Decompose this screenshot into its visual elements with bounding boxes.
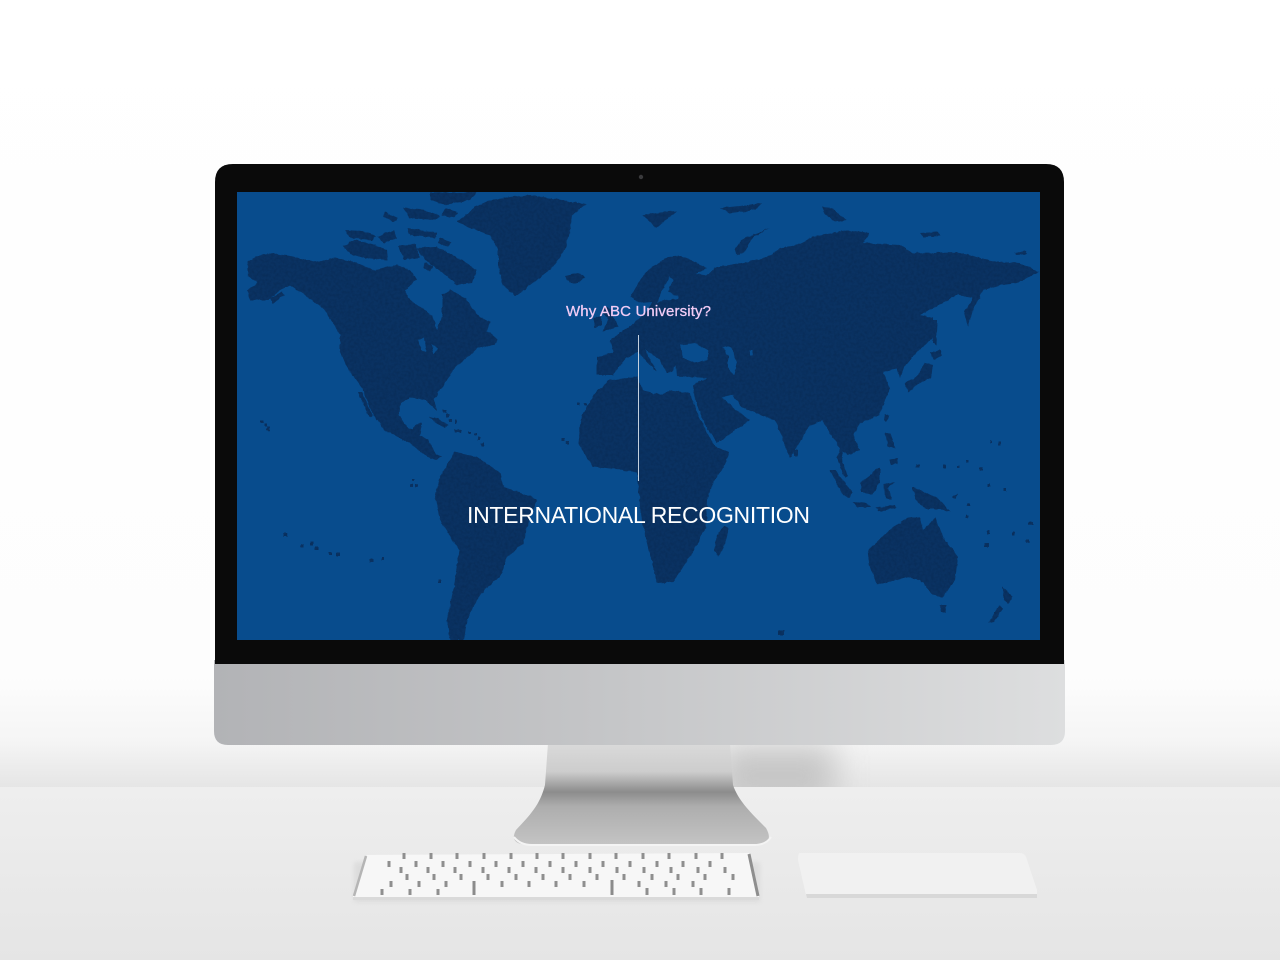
Greenland	[457, 195, 587, 297]
Africa	[578, 377, 730, 583]
Arctic Eurasian islands	[642, 203, 1027, 258]
trackpad	[798, 853, 1037, 898]
world map	[247, 192, 1039, 640]
Japan	[905, 320, 942, 392]
New Zealand	[988, 587, 1013, 623]
main title: INTERNATIONAL RECOGNITION	[467, 502, 810, 528]
subtitle: Why ABC University?	[566, 303, 711, 320]
webcam	[639, 175, 643, 179]
Canadian Arctic islands	[343, 192, 477, 285]
Eurasia	[597, 230, 1039, 462]
Tasmania	[940, 605, 947, 612]
United Kingdom and Ireland	[594, 306, 619, 331]
Alaska peninsula	[270, 292, 284, 304]
Iceland	[565, 273, 585, 283]
North America	[247, 253, 498, 460]
Madagascar	[714, 526, 729, 557]
monitor chin	[214, 660, 1065, 745]
keyboard keys	[382, 853, 733, 895]
screen background	[237, 192, 1040, 640]
monitor black bezel	[215, 164, 1064, 664]
stand shadow on wall	[730, 745, 848, 787]
vertical divider line	[638, 335, 639, 481]
Baja California	[358, 392, 373, 417]
Caribbean islands	[429, 410, 484, 446]
Indonesia and Philippines	[794, 414, 958, 512]
table surface	[0, 787, 1280, 960]
keyboard	[353, 853, 760, 902]
monitor stand	[514, 743, 771, 845]
small ocean islands	[260, 400, 1033, 635]
Australia	[868, 517, 958, 597]
South America	[435, 452, 537, 640]
monitor	[214, 164, 1065, 745]
